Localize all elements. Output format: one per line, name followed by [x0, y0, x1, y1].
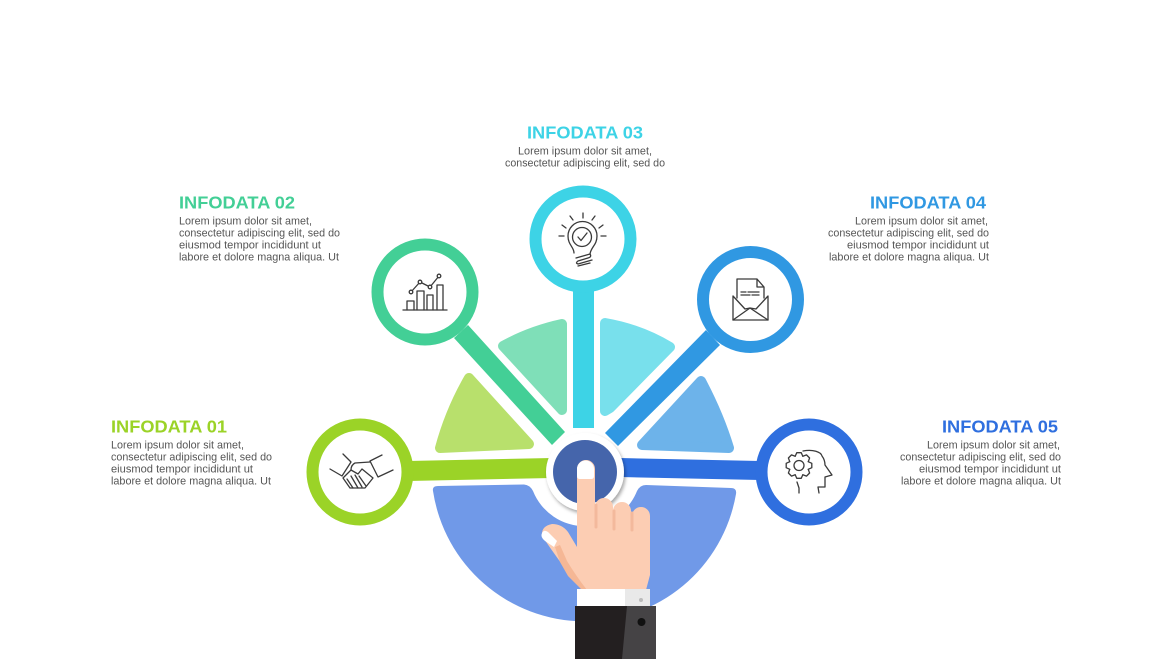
- text: infodata 01: INFODATA 01: [111, 416, 227, 436]
- text: infodata 02: Lorem ipsum dolor sit amet,: [179, 216, 312, 228]
- circle 03: bulb: [536, 192, 630, 286]
- circle 04: envelope: [703, 252, 798, 347]
- text: infodata 01: [111, 416, 272, 488]
- wedge: light cyan: [605, 323, 670, 411]
- text: infodata 02: [179, 192, 340, 264]
- circle 05: head gear: [762, 424, 856, 520]
- text: infodata 05: INFODATA 05: [942, 416, 1058, 436]
- text: infodata 04: [828, 192, 989, 264]
- icon: bar chart: [403, 274, 447, 310]
- icon: handshake: [330, 454, 393, 488]
- text: infodata 03: [505, 122, 665, 170]
- icon: head with gear: [786, 450, 832, 493]
- text: infodata 03: Lorem ipsum dolor sit amet,: [518, 146, 652, 158]
- text: infodata 05: consectetur adipiscing elit, sed do: [900, 452, 1061, 464]
- text: infodata 04: INFODATA 04: [870, 192, 986, 212]
- hand palm and fingers: [542, 460, 650, 590]
- text: infodata 01: labore et dolore magna aliqua. Ut: [111, 476, 271, 488]
- wedge: light blue: [642, 381, 729, 448]
- text: infodata 04: consectetur adipiscing elit, sed do: [828, 228, 989, 240]
- text: infodata 02: consectetur adipiscing elit, sed do: [179, 228, 340, 240]
- wedge: light teal: [503, 324, 562, 410]
- hand pointing: [541, 460, 656, 659]
- finger separators: [596, 505, 632, 530]
- connector bar 03: [573, 288, 594, 428]
- wedge: large bottom blue: [433, 484, 736, 621]
- connector bar 01: [408, 458, 552, 481]
- text: infodata 04: eiusmod tempor incididunt ut: [847, 240, 989, 252]
- text: infodata 05: [900, 416, 1061, 488]
- thumb nail: [541, 531, 557, 547]
- text: infodata 01: eiusmod tempor incididunt ut: [111, 464, 253, 476]
- wedge: light green: [440, 378, 529, 448]
- icon: light bulb: [559, 213, 606, 266]
- sleeve: [575, 606, 656, 659]
- icon: envelope: [733, 279, 768, 320]
- center button: [546, 433, 624, 511]
- circle 02: chart: [378, 244, 472, 340]
- text: infodata 01: Lorem ipsum dolor sit amet,: [111, 440, 244, 452]
- text: infodata 01: consectetur adipiscing elit, sed do: [111, 452, 272, 464]
- text: infodata 02: eiusmod tempor incididunt ut: [179, 240, 321, 252]
- text: infodata 05: Lorem ipsum dolor sit amet,: [927, 440, 1060, 452]
- connector bar 05: [620, 458, 760, 480]
- circle 01: handshake: [312, 424, 408, 520]
- text: infodata 02: labore et dolore magna aliqua. Ut: [179, 252, 339, 264]
- text: infodata 05: eiusmod tempor incididunt ut: [919, 464, 1061, 476]
- text: infodata 04: Lorem ipsum dolor sit amet,: [855, 216, 988, 228]
- text: infodata 03: consectetur adipiscing elit, sed do: [505, 158, 665, 170]
- connector bar 02: [454, 325, 565, 445]
- text: infodata 02: INFODATA 02: [179, 192, 295, 212]
- thumb shadow: [555, 545, 587, 590]
- finger nail: [577, 460, 594, 479]
- connector bar 04: [605, 330, 720, 446]
- text: infodata 05: labore et dolore magna aliqua. Ut: [901, 476, 1061, 488]
- text: infodata 03: INFODATA 03: [527, 122, 643, 142]
- shirt cuff: [577, 589, 650, 606]
- text: infodata 04: labore et dolore magna aliqua. Ut: [829, 252, 989, 264]
- sleeve button: [638, 618, 646, 626]
